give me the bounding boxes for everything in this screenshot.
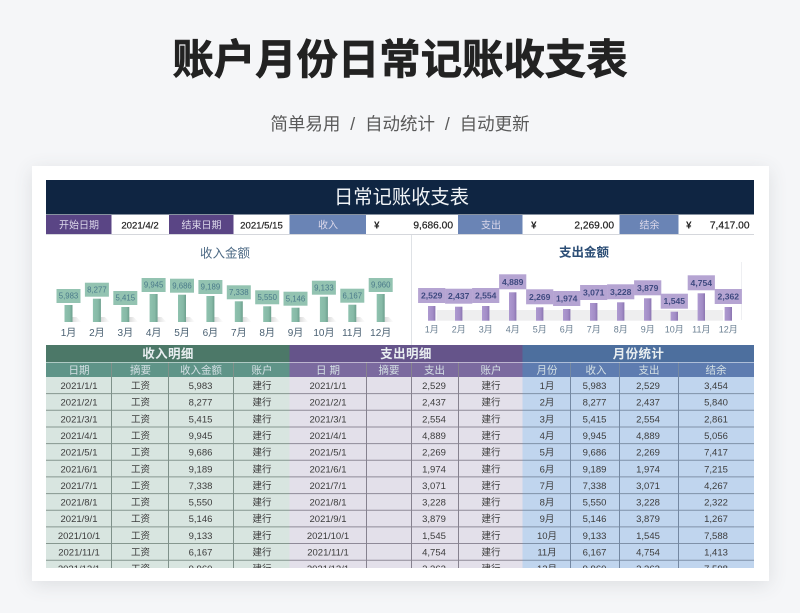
panel: white card	[32, 166, 769, 581]
monthly row: 1,545	[636, 531, 660, 542]
expense row: 建行	[481, 447, 501, 459]
monthly row: 2,269	[636, 448, 660, 459]
bar 8月	[607, 284, 634, 334]
bar 9月: 9月	[288, 327, 303, 339]
monthly row: 7,588	[704, 531, 728, 542]
bar 8月: 8月	[259, 327, 275, 339]
chart title: 收入金额	[200, 246, 250, 260]
monthly row: 5月	[540, 448, 554, 459]
expense value: ¥	[531, 220, 537, 232]
expense row: 建行	[481, 497, 501, 509]
income row: 2021/7/1	[61, 481, 97, 492]
income row	[58, 547, 272, 557]
bar 12月: 9,960	[371, 281, 391, 290]
income row: 2021/2/1	[61, 398, 97, 409]
monthly row: 3,879	[636, 514, 660, 525]
bar 8月	[255, 290, 280, 339]
monthly row: 7,215	[704, 464, 728, 475]
income row: 建行	[252, 397, 272, 409]
bar 5月: 2,269	[529, 292, 551, 302]
expense row	[310, 397, 500, 407]
expense column headers: 账户	[480, 364, 502, 376]
monthly row: 8月	[540, 498, 554, 509]
monthly row: 7,338	[583, 481, 606, 492]
bar 2月: 2月	[89, 327, 105, 339]
monthly row: 9,189	[583, 464, 606, 475]
income row: 2021/4/1	[61, 431, 97, 442]
bar 10月: 1,545	[664, 296, 685, 306]
panel: spreadsheet	[46, 180, 754, 568]
income row: 2021/6/1	[61, 464, 97, 475]
income row	[61, 397, 272, 407]
end date label: 结束日期	[182, 218, 222, 232]
income row: 8,277	[189, 398, 212, 409]
income row	[58, 530, 272, 540]
expense row	[310, 380, 500, 390]
sheet title band: 日常记账收支表	[334, 186, 469, 208]
income row: 2021/11/1	[58, 548, 100, 558]
income row: 2021/12/1	[58, 564, 100, 575]
monthly row: 2月	[540, 398, 554, 409]
bar 10月: 10月	[665, 324, 684, 334]
income row: 建行	[252, 413, 272, 425]
income row: 2021/8/1	[61, 498, 97, 509]
bar 5月	[170, 279, 195, 339]
expense row	[310, 497, 500, 507]
monthly section header	[522, 345, 754, 362]
subtitle: 简单易用 / 自动统计 / 自动更新	[270, 114, 530, 134]
bar 7月	[227, 285, 252, 339]
bar 3月	[113, 291, 138, 339]
income column headers: 日期	[68, 364, 90, 376]
income row: 2021/5/1	[61, 448, 97, 459]
monthly row: 4,754	[636, 548, 660, 558]
expense row	[310, 464, 500, 474]
monthly row: 3,228	[636, 498, 660, 509]
monthly row	[537, 531, 728, 542]
monthly row	[537, 548, 728, 558]
monthly column headers: 支出	[638, 364, 660, 376]
monthly row: 3月	[540, 414, 554, 425]
expense row: 2,362	[422, 564, 446, 575]
expense value	[531, 220, 614, 232]
monthly row	[537, 564, 728, 575]
start date label	[46, 215, 112, 234]
bar 4月: 9,945	[144, 281, 164, 290]
income row: 建行	[252, 430, 272, 442]
expense row: 建行	[481, 480, 501, 492]
bar 12月	[369, 278, 394, 339]
expense column headers: 日 期	[316, 364, 340, 376]
monthly row: 12月	[537, 564, 557, 575]
income row: 2021/1/1	[61, 381, 97, 392]
bar 2月	[445, 289, 472, 334]
bar 11月: 11月	[692, 324, 710, 334]
income row: 工资	[131, 464, 150, 475]
bar 7月	[580, 285, 607, 334]
bar 7月: 3,071	[583, 288, 605, 298]
monthly row: 4月	[540, 431, 554, 442]
end date label	[169, 215, 234, 234]
bar 10月: 10月	[313, 327, 334, 339]
bar 4月: 4,889	[502, 277, 524, 287]
expense row	[308, 547, 500, 557]
expense row: 2021/8/1	[310, 498, 346, 509]
bar 3月: 3月	[118, 327, 133, 339]
income row: 工资	[131, 531, 150, 542]
bar 4月	[499, 274, 526, 334]
income value	[374, 220, 453, 232]
income row: 建行	[252, 480, 272, 492]
chart: income amount	[46, 235, 411, 345]
chart: expense amount	[411, 235, 754, 345]
income row: 工资	[131, 548, 150, 558]
bar 11月	[688, 275, 715, 334]
monthly row: 6,167	[583, 548, 606, 558]
expense row: 2,437	[422, 398, 446, 409]
bar 6月: 9,189	[201, 283, 220, 292]
expense row: 建行	[481, 563, 501, 575]
monthly row	[540, 448, 728, 457]
bar 10月	[312, 281, 337, 339]
end date value: 2021/5/15	[240, 220, 283, 232]
monthly row	[540, 414, 728, 424]
monthly row: 2,529	[636, 381, 660, 392]
monthly row	[540, 431, 728, 440]
income row: 工资	[131, 564, 150, 575]
bar 4月	[142, 278, 167, 339]
expense row: 2021/5/1	[310, 448, 346, 459]
expense column headers: 支出	[424, 364, 445, 376]
income column headers: 账户	[252, 364, 272, 376]
expense row: 2,529	[422, 381, 446, 392]
expense row: 建行	[481, 546, 501, 558]
expense row: 2021/1/1	[310, 381, 346, 392]
monthly row: 1月	[540, 381, 554, 392]
expense label	[458, 215, 522, 234]
summary row	[46, 214, 754, 235]
monthly row: 9,686	[583, 448, 606, 459]
bar 1月: 1月	[61, 327, 76, 339]
monthly row: 6月	[540, 464, 554, 475]
income section header: 收入明细	[142, 346, 194, 361]
income value: ¥	[374, 220, 380, 232]
income label: 收入	[318, 218, 338, 232]
income row: 建行	[252, 563, 272, 575]
income row: 工资	[131, 448, 150, 459]
income row: 工资	[131, 381, 150, 392]
bar 9月: 9月	[641, 324, 655, 334]
monthly row: 5,146	[583, 514, 606, 525]
expense row: 建行	[481, 463, 501, 475]
expense row: 2021/9/1	[310, 514, 346, 525]
income row: 5,415	[189, 414, 212, 425]
income row: 5,146	[189, 514, 212, 525]
income row: 9,133	[189, 531, 212, 542]
expense row: 建行	[481, 413, 501, 425]
monthly row	[540, 498, 728, 509]
bar 6月	[198, 280, 223, 339]
bar 9月: 3,879	[637, 283, 659, 293]
expense row: 1,545	[422, 531, 446, 542]
expense label: 支出	[481, 218, 501, 232]
table: income details	[46, 345, 290, 575]
monthly row	[540, 481, 728, 492]
income row: 9,189	[189, 464, 212, 475]
income row	[61, 430, 272, 440]
expense row: 3,879	[422, 514, 446, 525]
income column headers: 收入金额	[180, 364, 222, 376]
expense row: 3,071	[422, 481, 446, 492]
table: monthly statistics	[522, 345, 754, 575]
expense row: 1,974	[422, 464, 446, 475]
monthly row: 5,983	[583, 381, 606, 392]
expense column headers: 摘要	[378, 364, 400, 376]
bar 1月: 2,529	[421, 290, 443, 300]
monthly row: 5,056	[704, 431, 728, 442]
expense row: 2021/7/1	[310, 481, 346, 492]
bar 1月	[418, 288, 445, 334]
bar 4月: 4月	[146, 327, 161, 339]
monthly row: 2,861	[704, 414, 728, 425]
income row	[61, 497, 272, 507]
monthly row: 11月	[537, 548, 557, 558]
income row: 工资	[131, 514, 150, 525]
monthly row: 2,362	[636, 564, 660, 575]
start date value: 2021/4/2	[121, 220, 159, 232]
monthly row: 1,267	[704, 514, 728, 525]
bar 9月	[284, 292, 308, 339]
expense row: 4,889	[422, 431, 446, 442]
bar 6月	[553, 291, 580, 334]
monthly row: 9,945	[583, 431, 606, 442]
monthly row: 4,889	[636, 431, 660, 442]
monthly row: 5,840	[704, 398, 728, 409]
monthly row: 8,277	[583, 398, 606, 409]
expense row: 建行	[481, 530, 501, 542]
income row: 5,550	[189, 498, 212, 509]
income row: 2021/9/1	[61, 514, 97, 525]
expense row	[310, 514, 500, 524]
monthly column headers: 结余	[706, 364, 727, 376]
bar 6月: 6月	[560, 324, 574, 334]
bar 8月: 8月	[614, 324, 628, 334]
bar 3月: 3月	[479, 324, 493, 334]
monthly row: 4,267	[704, 481, 728, 492]
income row: 9,945	[189, 431, 212, 442]
income row: 建行	[252, 497, 272, 509]
expense section header: 支出明细	[380, 346, 432, 361]
monthly column headers: 月份	[536, 364, 558, 376]
bar 11月: 11月	[342, 327, 362, 339]
income label	[290, 215, 366, 234]
expense row	[307, 530, 500, 540]
bar 5月	[526, 289, 553, 334]
monthly row: 5,415	[583, 414, 606, 425]
income row	[61, 464, 272, 474]
expense row: 4,754	[422, 548, 446, 558]
expense row: 2021/10/1	[307, 531, 349, 542]
expense row	[310, 447, 500, 457]
expense column headers	[290, 362, 522, 377]
income row	[61, 514, 272, 524]
income column headers: 摘要	[130, 364, 151, 376]
title: 账户月份日常记账收支表	[172, 37, 628, 83]
monthly row	[540, 381, 728, 390]
income section header	[46, 345, 290, 362]
bar 5月: 5月	[533, 324, 547, 334]
bar 6月: 6月	[203, 327, 218, 339]
expense row: 建行	[481, 430, 501, 442]
monthly row: 7月	[540, 481, 554, 492]
monthly row: 2,437	[636, 398, 660, 409]
bar 7月: 7月	[587, 324, 601, 334]
bar 9月	[634, 280, 661, 334]
income row: 工资	[131, 398, 150, 409]
income row: 建行	[252, 546, 272, 558]
chart title: 支出金额	[559, 244, 609, 260]
bar 7月: 7,338	[229, 288, 249, 297]
monthly row: 7,417	[704, 448, 728, 459]
bar 4月: 4月	[506, 324, 520, 334]
balance value	[686, 220, 750, 232]
income column headers	[46, 362, 290, 377]
bar 5月: 5月	[174, 327, 190, 339]
monthly row	[540, 514, 728, 525]
monthly row: 2,322	[704, 498, 728, 509]
expense section header	[290, 345, 522, 362]
bar 6月: 1,974	[556, 294, 578, 304]
expense row: 2,554	[422, 414, 446, 425]
balance value: ¥	[686, 220, 692, 232]
expense row: 建行	[481, 513, 501, 525]
bar 10月	[661, 294, 688, 334]
bar 12月: 12月	[719, 324, 738, 334]
bar 11月: 6,167	[343, 291, 362, 300]
bar 2月: 2月	[452, 324, 466, 334]
sheet title band	[46, 180, 754, 214]
monthly row: 2,554	[636, 414, 660, 425]
bar 2月: 2,437	[448, 291, 470, 301]
bar 2月	[85, 283, 110, 339]
monthly row: 3,071	[636, 481, 660, 492]
expense row	[310, 430, 500, 440]
monthly row: 9月	[540, 514, 554, 525]
income row: 建行	[252, 463, 272, 475]
income row: 建行	[252, 380, 272, 392]
income row: 9,960	[189, 564, 212, 575]
expense row: 2021/11/1	[307, 548, 349, 558]
expense row	[307, 564, 500, 568]
balance label	[620, 215, 678, 234]
monthly section header: 月份统计	[613, 346, 664, 361]
income row	[58, 564, 272, 568]
bar 5月: 9,686	[172, 281, 192, 290]
income row: 建行	[252, 447, 272, 459]
income row: 6,167	[189, 548, 212, 558]
table: expense details	[290, 345, 522, 575]
bar 11月	[340, 289, 365, 339]
monthly row: 9,133	[583, 531, 606, 542]
income row	[61, 380, 272, 390]
income row	[61, 480, 272, 490]
bar 9月: 5,146	[286, 294, 305, 303]
expense row: 2021/12/1	[307, 564, 349, 575]
monthly row: 7,598	[704, 564, 728, 575]
expense row: 3,228	[422, 498, 446, 509]
bar 8月: 3,228	[610, 287, 632, 297]
bar 12月: 2,362	[718, 292, 739, 302]
expense value: 2,269.00	[574, 220, 614, 232]
bar 3月: 2,554	[475, 290, 497, 300]
bar 7月: 7月	[231, 327, 247, 339]
bar 2月: 8,277	[87, 285, 107, 294]
bar 12月: 12月	[370, 327, 391, 339]
monthly column headers	[522, 362, 754, 377]
monthly row: 10月	[537, 531, 557, 542]
bar 3月: 5,415	[116, 294, 136, 303]
expense row: 2021/6/1	[310, 464, 346, 475]
income value: 9,686.00	[413, 220, 453, 232]
expense row: 2,269	[422, 448, 446, 459]
start date label: 开始日期	[59, 218, 99, 232]
expense row	[310, 414, 500, 424]
income row: 2021/10/1	[58, 531, 100, 542]
bar 1月: 1月	[425, 324, 439, 334]
bar 8月: 5,550	[257, 293, 278, 302]
income row: 工资	[131, 431, 150, 442]
bar 11月: 4,754	[691, 278, 712, 288]
monthly column headers: 收入	[586, 364, 607, 376]
income row: 工资	[131, 414, 150, 425]
balance value: 7,417.00	[710, 220, 750, 232]
income row: 5,983	[189, 381, 212, 392]
expense row: 2021/3/1	[310, 414, 346, 425]
bar 1月: 5,983	[59, 292, 78, 301]
income row: 2021/3/1	[61, 414, 97, 425]
monthly row: 5,550	[583, 498, 606, 509]
expense row: 2021/2/1	[310, 398, 346, 409]
expense row: 建行	[481, 380, 501, 392]
monthly row	[540, 398, 728, 407]
bar 1月	[56, 289, 82, 339]
income row: 工资	[131, 481, 150, 492]
monthly row: 1,413	[704, 548, 728, 558]
monthly row	[540, 464, 728, 474]
balance label: 结余	[640, 218, 660, 232]
income row: 9,686	[189, 448, 212, 459]
expense row: 2021/4/1	[310, 431, 346, 442]
income row	[61, 414, 272, 424]
monthly row: 9,960	[583, 564, 606, 575]
monthly row: 3,454	[704, 381, 728, 392]
income row: 建行	[252, 530, 272, 542]
income row: 7,338	[189, 481, 212, 492]
bar 3月	[472, 288, 499, 334]
bar 10月: 9,133	[314, 283, 334, 292]
income row: 建行	[252, 513, 272, 525]
expense row	[310, 480, 500, 490]
income row: 工资	[131, 498, 150, 509]
income row	[61, 447, 272, 457]
expense row: 建行	[481, 397, 501, 409]
monthly row: 1,974	[636, 464, 660, 475]
bar 12月	[715, 289, 742, 334]
